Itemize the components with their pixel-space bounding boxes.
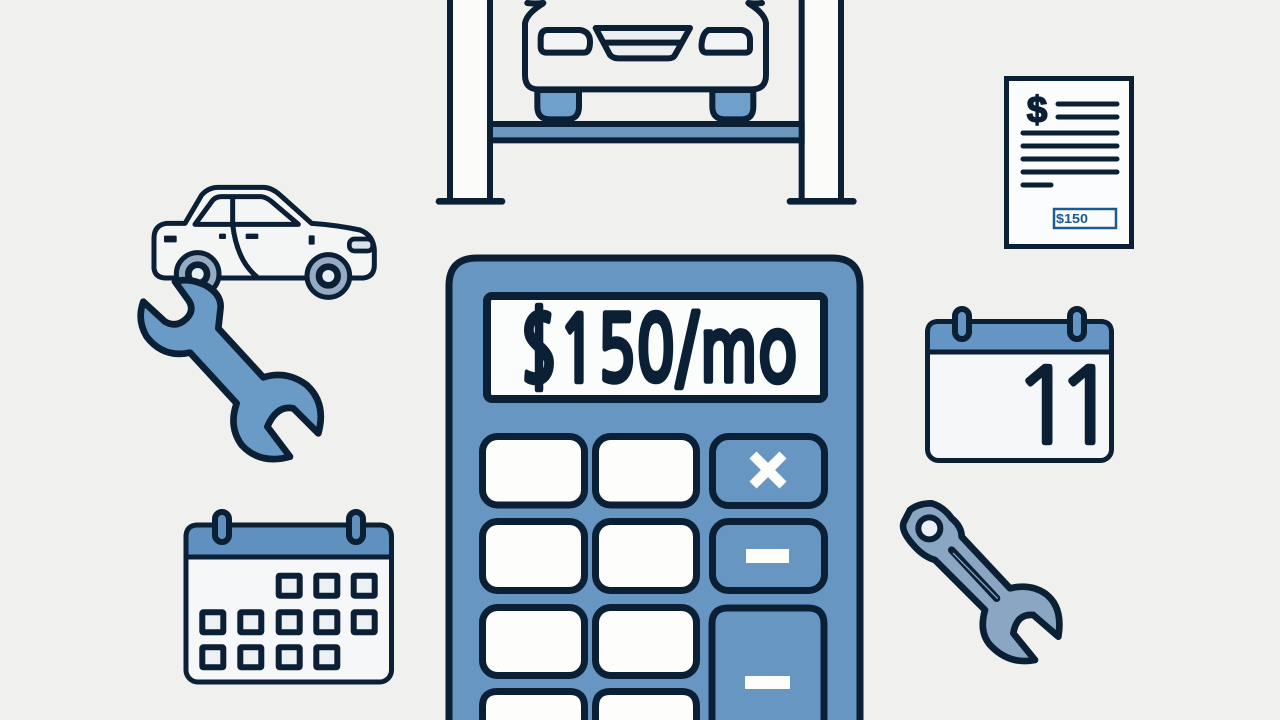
- multiply key: [712, 436, 824, 506]
- lift platform: [490, 124, 802, 140]
- car door handles and lights: [164, 234, 315, 245]
- icon: calculator: [449, 258, 860, 720]
- car mirrors: [527, 0, 762, 12]
- icon: large wrench: [141, 280, 321, 459]
- minus key: [712, 522, 824, 590]
- calculator body: [449, 258, 860, 720]
- calendar header: [186, 525, 392, 557]
- invoice total box: $150: [1056, 211, 1088, 226]
- front wheel: [307, 255, 350, 297]
- invoice dollar sign: $: [1027, 89, 1048, 130]
- wrench slot: [952, 550, 997, 598]
- calendar rings: [955, 309, 1084, 339]
- wrench hole: [918, 517, 940, 539]
- car wheels: [537, 90, 753, 119]
- car body outline: [154, 187, 374, 278]
- car grille: [596, 28, 690, 58]
- icon: invoice: [1006, 78, 1132, 246]
- calendar page: [928, 322, 1112, 460]
- number keys: [482, 436, 696, 720]
- calendar rings: [215, 512, 363, 542]
- calendar date squares: [202, 576, 375, 667]
- invoice text lines: [1023, 104, 1117, 185]
- calendar date: 1: [1012, 354, 1076, 459]
- invoice total box: [1054, 209, 1116, 228]
- icon: car on lift: [439, 0, 853, 201]
- car headlights: [541, 30, 750, 53]
- lift pillars: [439, 0, 853, 201]
- car headlight: [349, 239, 373, 251]
- car body: [525, 3, 766, 89]
- calendar page: [186, 525, 392, 682]
- tall minus key: [712, 608, 824, 720]
- calendar date: 1: [1055, 354, 1119, 459]
- icon: small wrench: [903, 503, 1059, 661]
- icon: side-view car: [154, 187, 374, 297]
- calendar header: [928, 322, 1112, 352]
- calculator display: [487, 296, 824, 399]
- rear wheel: [176, 253, 219, 295]
- calculator display: $150/mo: [519, 304, 797, 396]
- icon: calendar with 11: [928, 309, 1119, 460]
- icon: calendar with date grid: [186, 512, 392, 682]
- car windows: [195, 197, 298, 277]
